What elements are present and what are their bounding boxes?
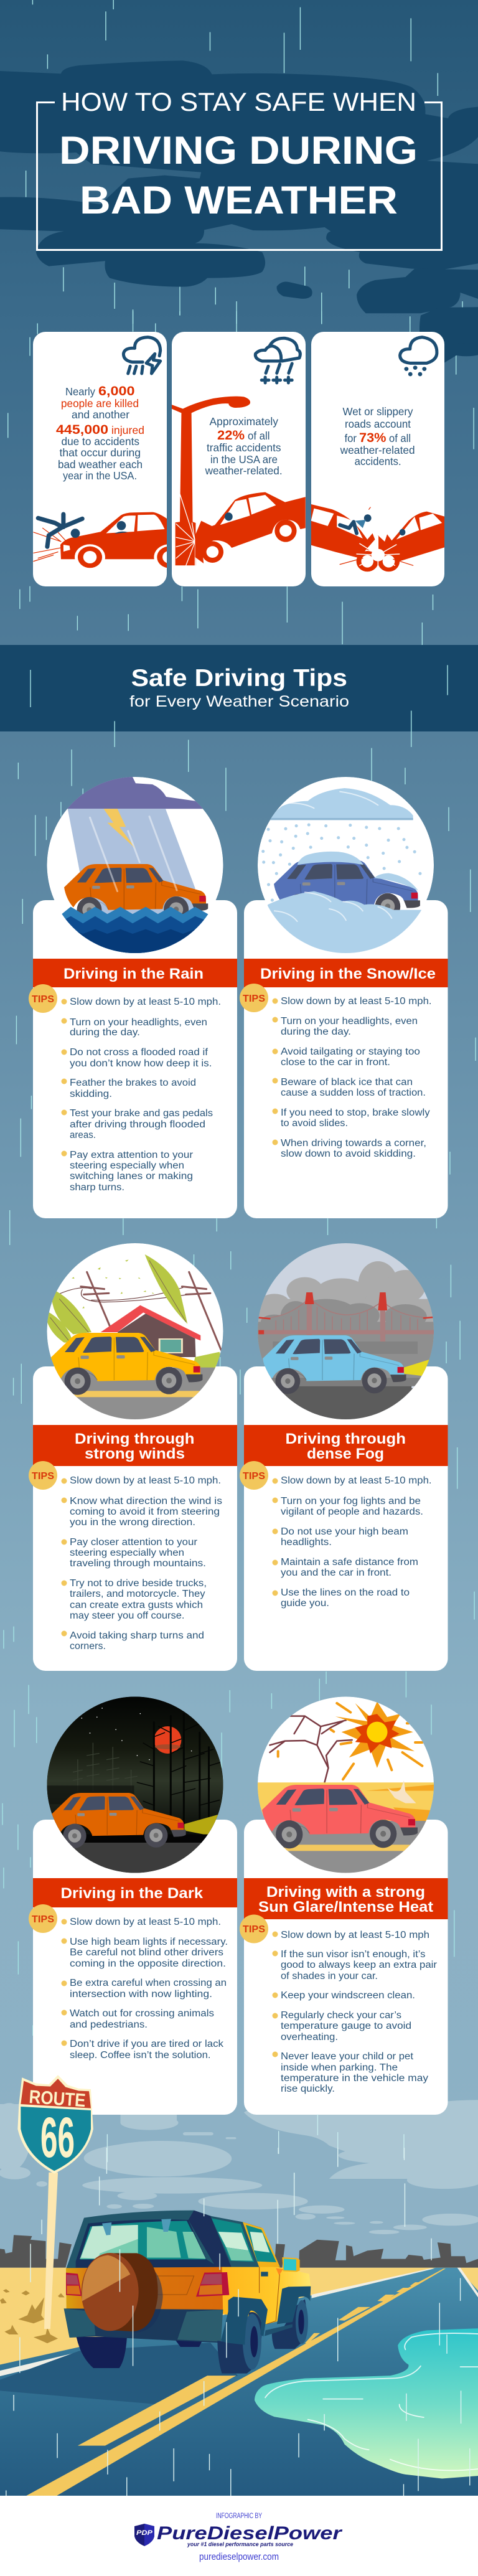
tips list: Avoid tailgating or staying too: [281, 1046, 420, 1057]
tips list: When driving towards a corner,: [281, 1138, 426, 1149]
tips list: you in the wrong direction.: [70, 1517, 195, 1528]
tips list: Slow down by at least 5-10 mph.: [281, 996, 432, 1007]
tips badge: TIPS: [243, 1924, 265, 1935]
rain streaks over lower sky: [107, 2115, 404, 2179]
stat text: [340, 405, 415, 468]
stat text: [205, 415, 283, 477]
tips list: sleep. Coffee isn’t the solution.: [70, 2050, 210, 2061]
tips list: [273, 1475, 432, 1609]
tips list: Slow down by at least 5-10 mph.: [70, 997, 221, 1007]
tips badge: TIPS: [243, 994, 265, 1004]
stat text: 6,000: [98, 384, 134, 398]
icon: storm cloud with lightning: [123, 337, 161, 374]
panel: driving in the rain: [29, 774, 237, 1218]
tips list: to avoid slides.: [281, 1118, 348, 1129]
stat text: in the USA are: [210, 453, 278, 466]
icon: clouds with rain and snow: [255, 338, 300, 383]
tips list: sharp turns.: [70, 1182, 124, 1193]
tips badge: [240, 1461, 268, 1490]
tips list: skidding.: [70, 1089, 112, 1099]
title line 2: DRIVING DURING: [59, 129, 418, 172]
tips list: inside when parking. The: [281, 2062, 398, 2073]
panel heading: Driving through: [75, 1431, 194, 1447]
jeep body: [66, 2267, 224, 2314]
stat text: due to accidents: [61, 435, 139, 448]
tips list: corners.: [70, 1641, 106, 1652]
jeep rear window: [80, 2221, 206, 2259]
title line 1: HOW TO STAY SAFE WHEN: [61, 87, 416, 116]
road edge lines: [0, 2268, 478, 2376]
route 66 sign: [17, 2075, 93, 2174]
panel heading: [75, 1431, 194, 1462]
tips badge: TIPS: [32, 994, 54, 1005]
tips list: overheating.: [281, 2032, 338, 2042]
tips list: Regularly check your car’s: [281, 2010, 401, 2021]
tips list: Test your brake and gas pedals: [70, 1108, 213, 1119]
tips list: headlights.: [281, 1537, 332, 1548]
tips list: trailers, and motorcycle. They: [70, 1589, 205, 1599]
red header bar: [244, 1425, 448, 1466]
stat text: year in the USA.: [63, 469, 137, 482]
stat text: Nearly: [65, 385, 95, 398]
jeep: [64, 2211, 311, 2374]
panel heading: dense Fog: [307, 1445, 384, 1462]
panel heading: Driving with a strong: [266, 1884, 425, 1901]
jeep cabin: [67, 2211, 280, 2269]
tips list: Keep your windscreen clean.: [281, 1990, 415, 2001]
stat text: roads account: [345, 418, 411, 430]
tips list: during the day.: [70, 1027, 140, 1038]
tips list: coming to avoid it from steering: [70, 1507, 220, 1517]
scene: car in flood with lightning: [45, 774, 223, 954]
stat text: accidents.: [355, 455, 401, 468]
illustration: car hitting pedestrian: [33, 512, 167, 568]
tips list: slow down to avoid skidding.: [281, 1149, 416, 1159]
tips list: Pay closer attention to your: [70, 1537, 197, 1548]
tips list: intersection with now lighting.: [70, 1989, 212, 2000]
puddle: [255, 2328, 478, 2479]
stat text: of all: [389, 432, 411, 444]
panel heading: Driving in the Rain: [63, 966, 204, 982]
tips list: Feather the brakes to avoid: [70, 1078, 196, 1088]
tips badge: [240, 1915, 268, 1944]
section banner: [0, 645, 478, 731]
jeep hidden tyres: [77, 2337, 202, 2368]
tips list: Turn on your headlights, even: [281, 1016, 418, 1027]
rain over road: [6, 2148, 470, 2496]
tips list: Know what direction the wind is: [70, 1496, 222, 1507]
tips list: Pay extra attention to your: [70, 1150, 193, 1160]
tips list: Avoid taking sharp turns and: [70, 1630, 204, 1641]
red header bar: [244, 959, 448, 987]
mountains: [0, 2235, 478, 2268]
panel heading: Driving in the Snow/Ice: [260, 966, 436, 982]
tips list: Slow down by at least 5-10 mph.: [70, 1475, 221, 1486]
panel heading: [258, 1884, 433, 1916]
illustration: two cars colliding: [309, 504, 447, 571]
tips list: Be careful not blind other drivers: [70, 1947, 223, 1958]
logo shield: PDP: [136, 2529, 153, 2537]
panel: statistic 22% of accidents: [172, 332, 306, 586]
panel heading: strong winds: [85, 1445, 185, 1462]
tips badge: [240, 984, 268, 1012]
lower sky clouds: [0, 2100, 478, 2234]
tips list: traveling through mountains.: [70, 1558, 206, 1569]
tips badge: TIPS: [243, 1471, 265, 1482]
tips list: [61, 997, 221, 1193]
tips list: guide you.: [281, 1598, 329, 1609]
tips badge: [29, 984, 57, 1013]
tips list: of shades in your car.: [281, 1971, 378, 1981]
red header bar: [33, 959, 237, 987]
scene: car in snow: [258, 777, 434, 954]
tips list: you don’t know how deep it is.: [70, 1058, 212, 1069]
tips list: Try not to drive beside trucks,: [70, 1578, 207, 1589]
tips list: temperature gauge to avoid: [281, 2021, 411, 2031]
stat text: people are killed: [61, 397, 139, 410]
car shadow: [0, 2343, 238, 2404]
stat text: [56, 384, 144, 482]
tips badge: [29, 1461, 57, 1490]
red header bar: [33, 1425, 237, 1466]
icon: cloud with drops: [400, 337, 437, 376]
rain streaks over banner: [30, 665, 448, 747]
stat text: and another: [72, 408, 129, 421]
tips list: Slow down by at least 5-10 mph.: [281, 1475, 432, 1486]
tips list: If the sun visor isn’t enough, it’s: [281, 1949, 426, 1960]
panel: driving through strong winds: [29, 1243, 237, 1671]
tips list: [61, 1917, 228, 2061]
tips list: Turn on your headlights, even: [70, 1017, 207, 1028]
title block: [37, 87, 442, 250]
road sign post: [44, 2173, 58, 2329]
jeep tail lights: [66, 2272, 229, 2296]
scene: car in fog with bridge: [256, 1243, 439, 1424]
stat text: 445,000: [56, 423, 108, 437]
tips badge: TIPS: [32, 1471, 54, 1482]
tips list: Never leave your child or pet: [281, 2051, 414, 2062]
panel heading: [285, 1431, 406, 1462]
stat text: traffic accidents: [207, 441, 281, 454]
banner subheading: for Every Weather Scenario: [129, 693, 349, 710]
footer url: puredieselpower.com: [199, 2552, 279, 2562]
footer: [0, 2496, 478, 2576]
stat text: Wet or slippery: [342, 405, 413, 418]
tips list: areas.: [70, 1130, 96, 1140]
tips list: [273, 996, 432, 1159]
tips list: rise quickly.: [281, 2084, 335, 2094]
yellow road lines: [26, 2268, 446, 2496]
tips list: If you need to stop, brake slowly: [281, 1107, 430, 1118]
scene: car at night: [43, 1693, 228, 1876]
panel heading: Sun Glare/Intense Heat: [258, 1899, 433, 1916]
tips list: during the day.: [281, 1027, 351, 1037]
tips list: Beware of black ice that can: [281, 1077, 413, 1088]
jeep bumper: [64, 2308, 223, 2343]
stat text: 22%: [217, 428, 245, 443]
stat text: Approximately: [209, 415, 278, 428]
tips badge: [29, 1904, 57, 1933]
scene: car in strong winds: [40, 1243, 228, 1421]
road surface: [0, 2268, 478, 2496]
tips list: Do not cross a flooded road if: [70, 1047, 209, 1058]
illustration: car hitting lamp post: [172, 397, 306, 565]
tips list: [273, 1930, 437, 2094]
stat text: weather-related: [340, 444, 415, 456]
tips list: and pedestrians.: [70, 2019, 148, 2030]
title frame: [37, 102, 442, 250]
tips list: Don’t drive if you are tired or lack: [70, 2039, 223, 2049]
tips list: steering especially when: [70, 1160, 184, 1171]
jeep mirror: [282, 2257, 300, 2272]
tips list: cause a sudden loss of traction.: [281, 1088, 426, 1098]
tips list: temperature in the vehicle may: [281, 2073, 428, 2084]
panel: statistic 73% wet roads: [309, 332, 447, 586]
tips list: switching lanes or making: [70, 1171, 193, 1182]
tips list: Watch out for crossing animals: [70, 2008, 214, 2019]
jeep rear wheel: [217, 2312, 262, 2374]
logo shield: [134, 2524, 154, 2546]
panel: driving through dense fog: [240, 1243, 448, 1671]
tips list: you and the car in front.: [281, 1568, 391, 1578]
desert shrubs: [0, 2289, 65, 2343]
tips list: after driving through flooded: [70, 1119, 205, 1130]
tips list: vigilant of people and hazards.: [281, 1507, 423, 1517]
red header bar: [244, 1878, 448, 1919]
tips list: Turn on your fog lights and be: [281, 1496, 421, 1507]
panel heading: Driving through: [285, 1431, 406, 1447]
panel: driving in the dark: [29, 1693, 237, 2115]
tips list: can create extra gusts which: [70, 1600, 203, 1610]
stat text: injured: [111, 424, 144, 436]
jeep spare tyre: [133, 2260, 163, 2333]
tips list: good to always keep an extra pair: [281, 1960, 437, 1970]
red header bar: [33, 1878, 237, 1907]
stat text: bad weather each: [58, 458, 143, 471]
tips list: Maintain a safe distance from: [281, 1557, 418, 1568]
banner heading: Safe Driving Tips: [131, 665, 347, 692]
title line 3: BAD WEATHER: [80, 179, 398, 222]
tips badge: TIPS: [32, 1914, 54, 1925]
storm clouds behind title: [0, 60, 478, 374]
tips list: Do not use your high beam: [281, 1526, 408, 1537]
stat text: of all: [248, 430, 270, 442]
tips list: coming in the opposite direction.: [70, 1958, 226, 1969]
logo wordmark: PureDieselPower: [157, 2523, 343, 2544]
stat text: weather-related.: [205, 464, 283, 477]
tips list: [61, 1475, 222, 1652]
panel heading: Driving in the Dark: [61, 1885, 204, 1902]
panel: driving in the snow: [240, 777, 448, 1218]
panel: driving with sun glare and heat: [240, 1697, 448, 2115]
tips list: may steer you off course.: [70, 1610, 184, 1621]
stat text: for: [345, 432, 357, 444]
tips list: Use high beam lights if necessary.: [70, 1937, 228, 1947]
desert sand: [0, 2268, 478, 2367]
stat text: 73%: [359, 431, 387, 445]
tips list: Use the lines on the road to: [281, 1587, 410, 1598]
sign text: ROUTE: [29, 2087, 87, 2111]
jeep side windows: [212, 2218, 254, 2262]
tips list: close to the car in front.: [281, 1057, 390, 1068]
panel: statistic 6,000 killed: [33, 332, 167, 586]
tips list: steering especially when: [70, 1548, 184, 1558]
rain streaks behind content: [2, 0, 476, 2036]
road scene: [0, 2173, 478, 2496]
scene: car in desert heat: [256, 1697, 439, 1879]
tips list: Be extra careful when crossing an: [70, 1978, 227, 1988]
footer credit: INFOGRAPHIC BY: [216, 2513, 262, 2520]
logo tagline: your #1 diesel performance parts source: [187, 2541, 294, 2548]
tips list: Slow down by at least 5-10 mph.: [70, 1917, 221, 1927]
jeep front wheel: [272, 2299, 307, 2349]
tips list: Slow down by at least 5-10 mph: [281, 1930, 429, 1940]
sign number: 66: [40, 2106, 75, 2169]
stat text: that occur during: [60, 446, 141, 459]
